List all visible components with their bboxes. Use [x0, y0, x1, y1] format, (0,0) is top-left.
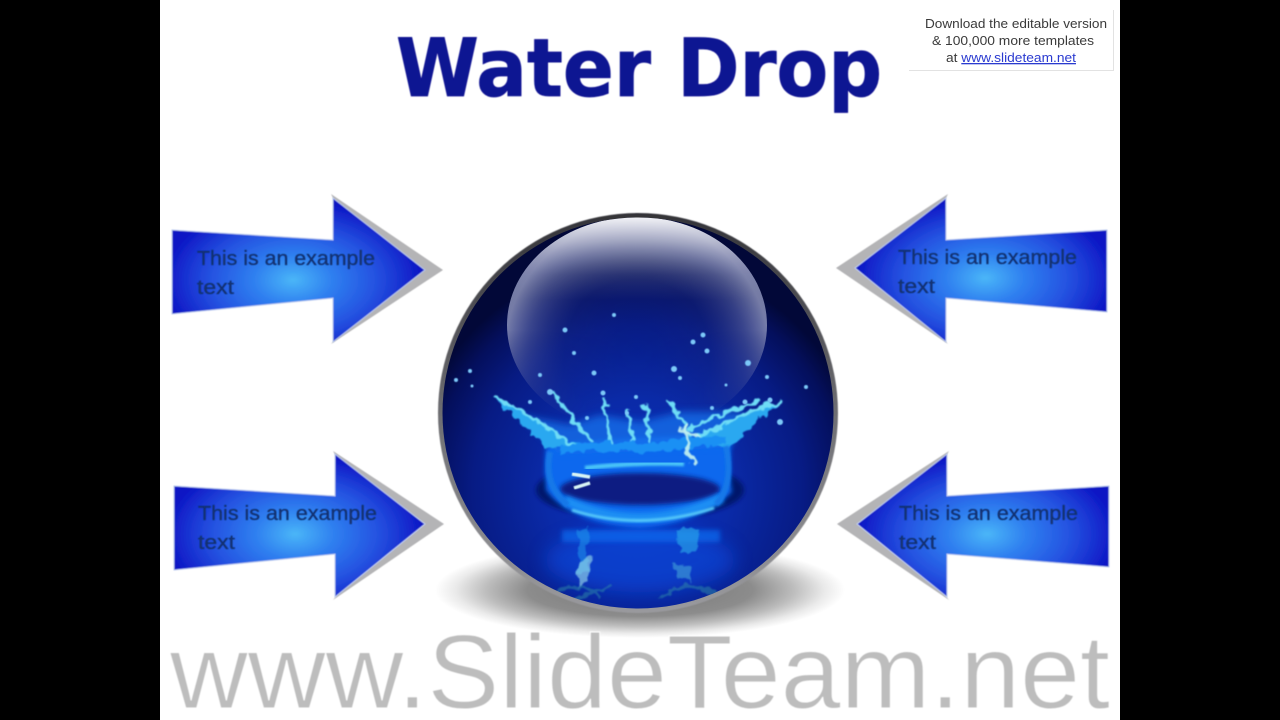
arrow: top right [836, 194, 1107, 344]
arrow: bottom left: This is an example [198, 503, 377, 525]
water droplets [454, 313, 808, 425]
arrow: bottom left [174, 451, 444, 600]
splash crown [493, 393, 783, 528]
download note box [909, 10, 1114, 70]
white slide background [160, 0, 1120, 720]
arrow: top right: text [898, 276, 935, 298]
download note box: & 100,000 more templates [932, 33, 1095, 48]
arrow: bottom right [837, 451, 1109, 600]
arrow: bottom right: text [899, 532, 936, 554]
arrow: top left [172, 194, 443, 344]
sphere ground shadow [435, 542, 845, 638]
reflection under splash [545, 528, 735, 600]
arrow: bottom left: text [198, 532, 235, 554]
arrow: bottom right: This is an example [899, 503, 1078, 525]
download note box: at www.slideteam.net [946, 50, 1076, 65]
glossy highlight [507, 218, 767, 404]
arrow: top left: This is an example [197, 248, 375, 270]
download note box: Download the editable version [925, 16, 1107, 31]
water drop sphere [438, 213, 838, 613]
arrow: top right: This is an example [898, 247, 1077, 269]
title: Water Drop [396, 22, 882, 115]
arrow: top left: text [197, 277, 234, 299]
